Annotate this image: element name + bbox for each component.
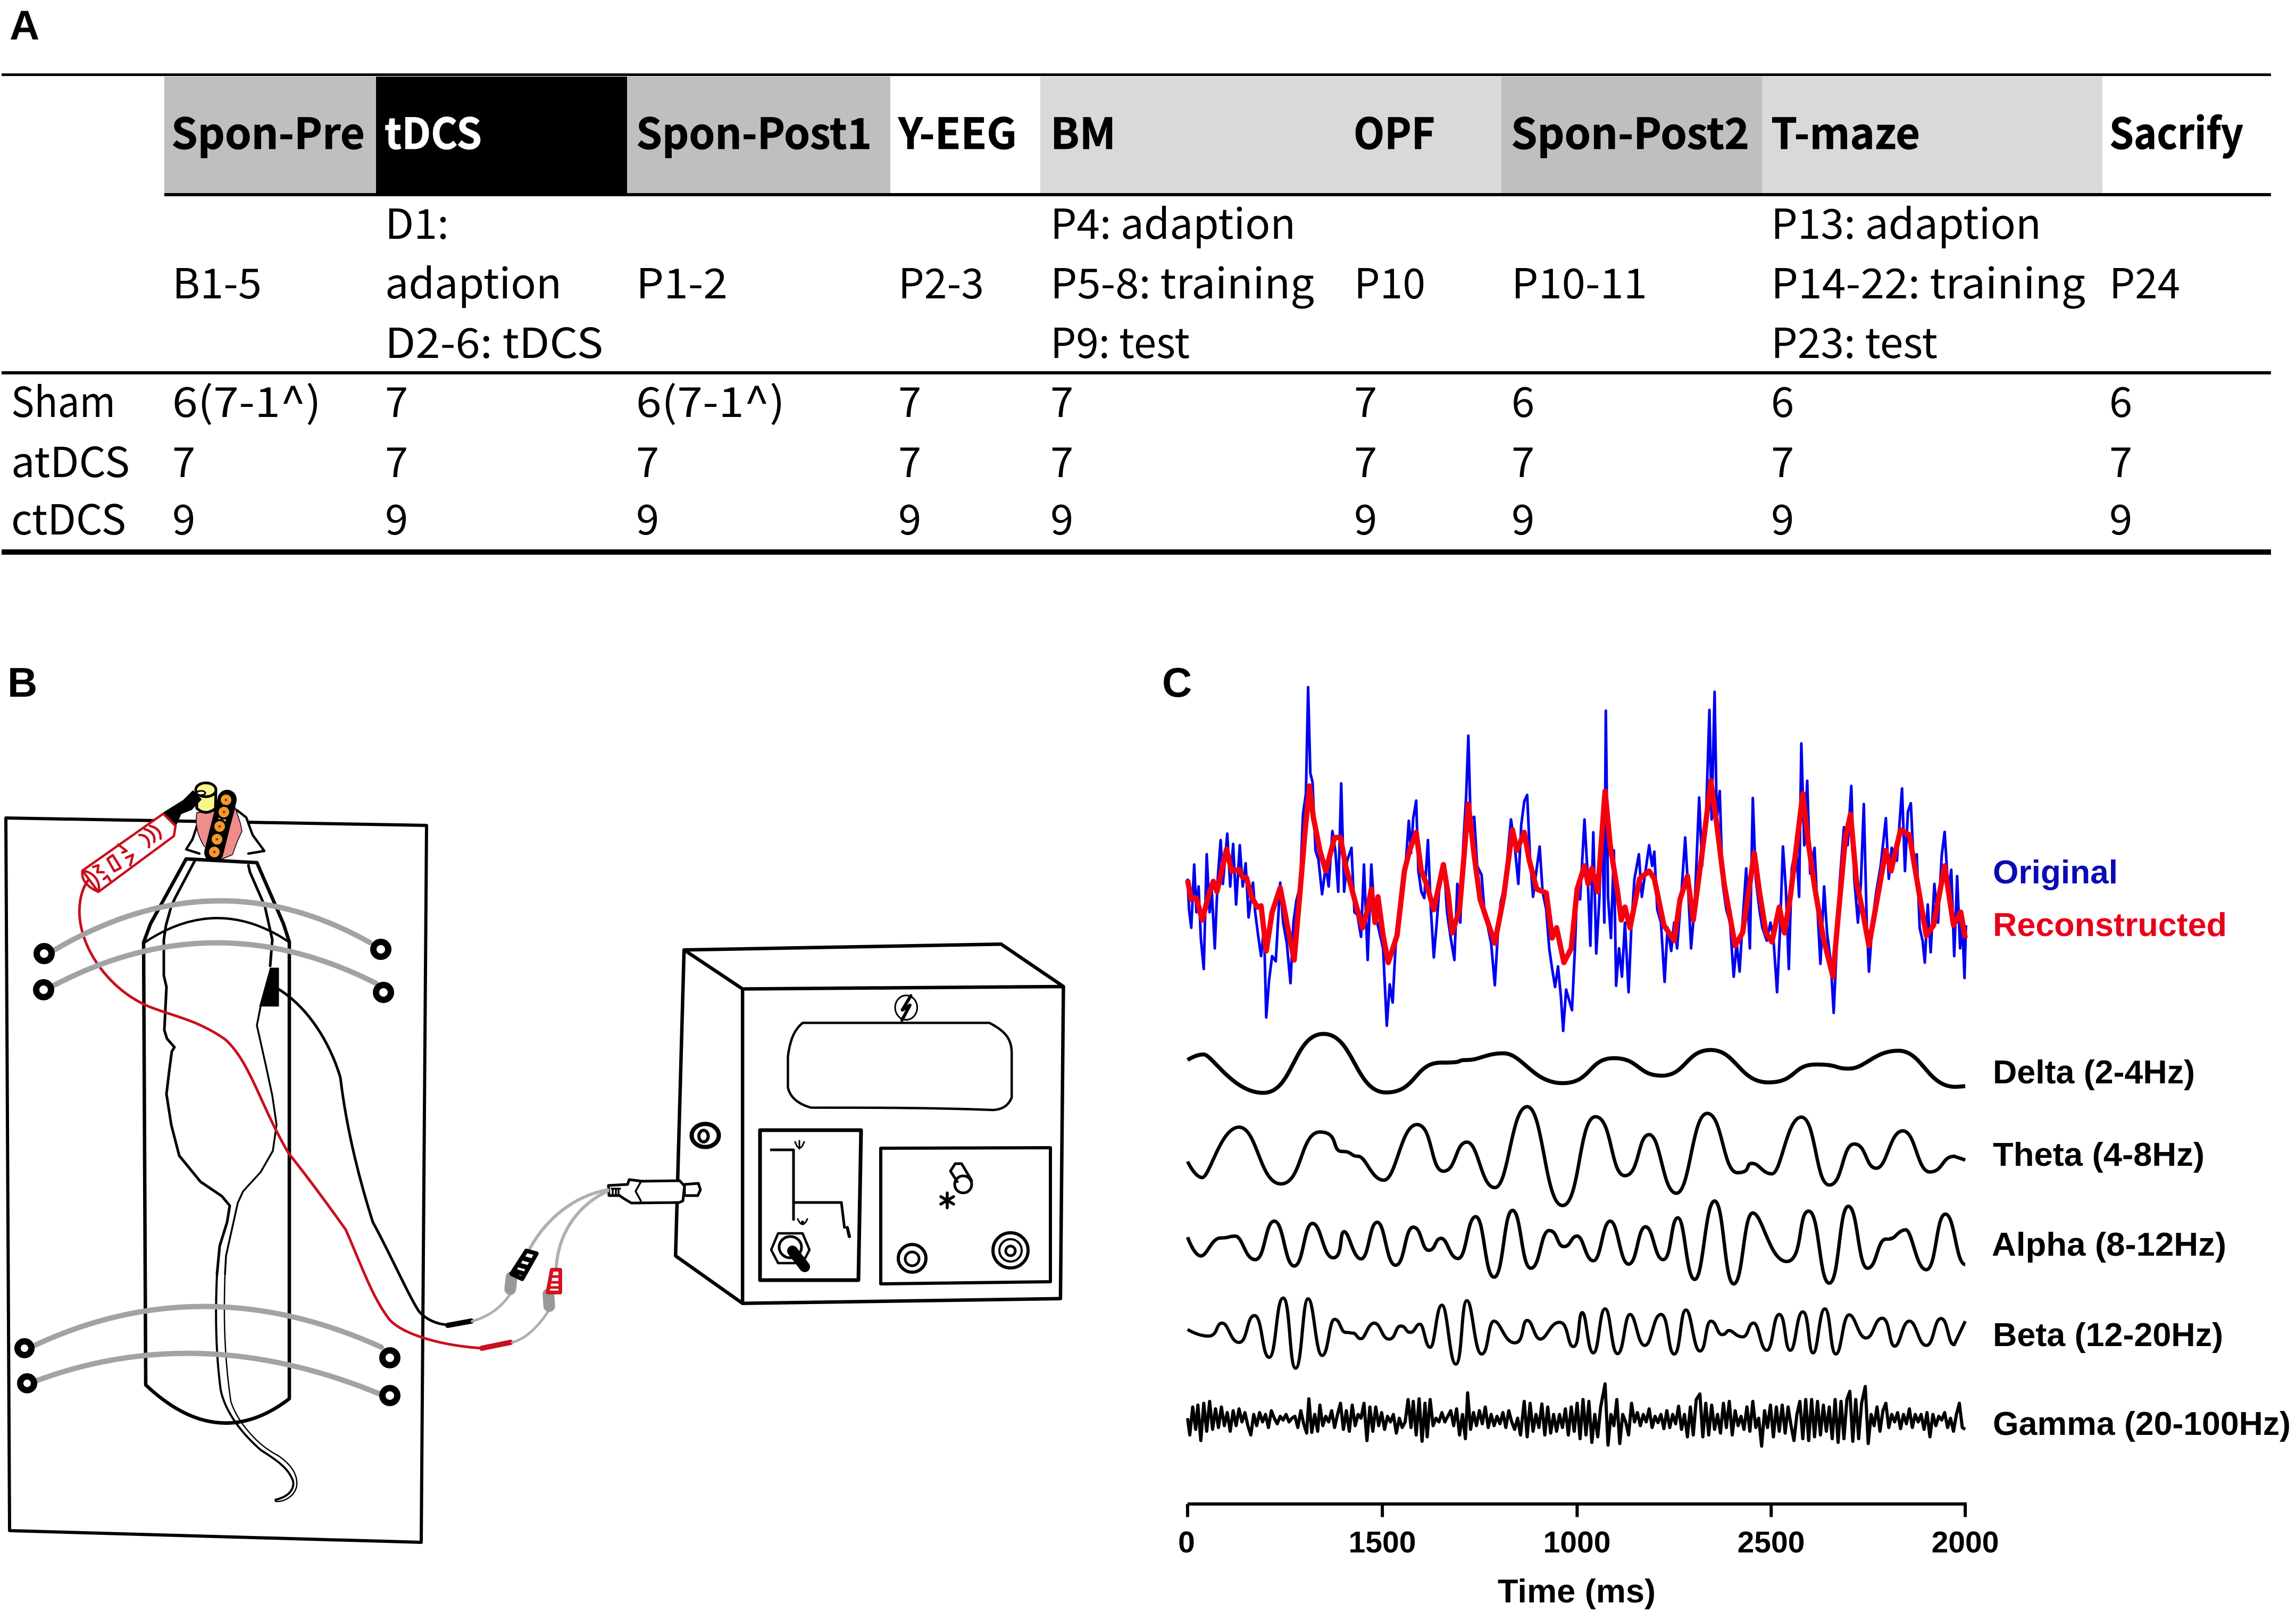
schedule row: P24 xyxy=(2109,251,2180,311)
alpha trace xyxy=(1188,1201,1965,1284)
legend: reconstructed: Reconstructed xyxy=(1993,907,2227,943)
axis tick labels: 1500 xyxy=(1349,1525,1416,1559)
table rules xyxy=(2,73,2271,555)
table header row: BM xyxy=(1050,100,1116,162)
switch panel xyxy=(760,1130,861,1280)
Sham row: 6 xyxy=(1771,370,1794,429)
schedule row: P4: adaption xyxy=(1050,191,1296,251)
atDCS row: 7 xyxy=(1050,430,1073,489)
yellow head electrode xyxy=(196,783,216,813)
atDCS row: 7 xyxy=(172,430,195,489)
schedule row: P2-3 xyxy=(898,251,984,311)
gamma trace xyxy=(1188,1384,1965,1446)
schedule row: P1-2 xyxy=(636,251,728,311)
band labels: Alpha (8-12Hz) xyxy=(1992,1226,2226,1263)
delta trace xyxy=(1188,1034,1965,1093)
Sham row: Sham xyxy=(11,370,115,429)
beta trace xyxy=(1188,1298,1965,1368)
split grey leads xyxy=(472,1190,608,1342)
frequency band traces xyxy=(1188,1034,1967,1517)
atDCS row: 7 xyxy=(898,430,921,489)
black body electrode and wire xyxy=(260,968,471,1325)
Sham row: 7 xyxy=(898,370,921,429)
table header row: T-maze xyxy=(1771,100,1920,162)
schedule row xyxy=(172,191,2180,370)
atDCS row: 7 xyxy=(1354,430,1377,489)
stimulator device with leads xyxy=(472,944,1063,1342)
band labels: Gamma (20-100Hz) xyxy=(1993,1406,2291,1442)
panel B: tDCS setup illustration xyxy=(6,659,1063,1542)
tube shoulder arc xyxy=(143,918,289,943)
atDCS row: 7 xyxy=(2109,430,2132,489)
black cable xyxy=(164,791,201,826)
atDCS row: 7 xyxy=(1771,430,1794,489)
table header row: Y-EEG xyxy=(898,100,1017,162)
schedule row: P13: adaption xyxy=(1771,191,2041,251)
Sham row: 6(7-1^) xyxy=(636,370,785,429)
ears xyxy=(186,810,264,854)
red head electrode wire xyxy=(79,878,511,1348)
schedule row: P23: test xyxy=(1771,311,1938,370)
ctDCS row: 9 xyxy=(385,487,408,547)
band labels xyxy=(1992,1054,2291,1442)
axis tick labels: 2000 xyxy=(1932,1525,1999,1559)
schedule row: adaption xyxy=(385,251,562,311)
panel label A: A xyxy=(10,2,39,48)
schedule row: D2-6: tDCS xyxy=(385,311,603,370)
table header row: Spon-Post1 xyxy=(636,100,872,162)
Sham row: 6 xyxy=(1512,370,1534,429)
plug xyxy=(608,1180,700,1203)
device housing xyxy=(675,944,1063,1304)
schedule row: P14-22: training xyxy=(1771,251,2085,311)
atDCS row: 7 xyxy=(636,430,659,489)
axis tick labels: 2500 xyxy=(1738,1525,1805,1559)
legend: original: Original xyxy=(1993,854,2118,891)
axis tick labels: 1000 xyxy=(1543,1525,1610,1559)
elastic straps xyxy=(29,901,383,1396)
atDCS row xyxy=(11,430,2132,489)
axis title: Time (ms) xyxy=(1498,1573,1656,1610)
output panel xyxy=(881,1148,1050,1284)
board outline xyxy=(6,818,427,1542)
red connector xyxy=(548,1270,560,1292)
Sham row: 6(7-1^) xyxy=(172,370,321,429)
black connector xyxy=(512,1251,537,1279)
raw and reconstructed signal xyxy=(1188,687,1966,1031)
strap pins xyxy=(18,942,397,1403)
schedule row: D1: xyxy=(385,191,449,251)
reconstructed red trace xyxy=(1188,781,1965,976)
axis tick labels xyxy=(1178,1525,1999,1559)
ctDCS row: 9 xyxy=(898,487,921,547)
time axis line and ticks xyxy=(1188,1504,1967,1517)
table header row: OPF xyxy=(1354,100,1435,162)
table header row xyxy=(164,77,2243,194)
red electrode connector xyxy=(82,814,176,892)
ctDCS row: 9 xyxy=(1050,487,1073,547)
restraint tube xyxy=(144,859,289,1423)
atDCS row: 7 xyxy=(385,430,408,489)
schedule row: B1-5 xyxy=(172,251,262,311)
panel label C: C xyxy=(1162,659,1192,706)
schedule row: P10 xyxy=(1354,251,1425,311)
Sham row: 7 xyxy=(385,370,408,429)
panel C: EEG decomposition chart xyxy=(1162,659,2291,1610)
restraint board with rat xyxy=(6,783,511,1542)
Sham row: 7 xyxy=(1354,370,1377,429)
table header row: tDCS xyxy=(385,100,482,162)
schedule row: P9: test xyxy=(1050,311,1190,370)
atDCS row: atDCS xyxy=(11,430,130,489)
ctDCS row: ctDCS xyxy=(11,487,126,547)
panel label B: B xyxy=(7,659,37,706)
electrode array xyxy=(208,794,232,858)
theta trace xyxy=(1188,1107,1965,1206)
band labels: Theta (4-8Hz) xyxy=(1993,1137,2205,1173)
exposed scalp xyxy=(196,807,242,860)
panel A: experiment timeline table xyxy=(2,2,2271,555)
rat body xyxy=(164,860,297,1501)
Sham row: 7 xyxy=(1050,370,1073,429)
ctDCS row: 9 xyxy=(636,487,659,547)
ctDCS row: 9 xyxy=(172,487,195,547)
band labels: Beta (12-20Hz) xyxy=(1993,1317,2223,1354)
atDCS row: 7 xyxy=(1512,430,1534,489)
axis tick labels: 0 xyxy=(1178,1525,1195,1559)
table header row: Spon-Post2 xyxy=(1511,100,1749,162)
schedule row: P10-11 xyxy=(1512,251,1647,311)
schedule row: P5-8: training xyxy=(1050,251,1314,311)
ctDCS row: 9 xyxy=(2109,487,2132,547)
ctDCS row: 9 xyxy=(1512,487,1534,547)
ctDCS row xyxy=(11,487,2132,547)
Sham row: 6 xyxy=(2109,370,2132,429)
band labels: Delta (2-4Hz) xyxy=(1993,1054,2195,1091)
original blue trace xyxy=(1188,687,1966,1031)
ctDCS row: 9 xyxy=(1354,487,1377,547)
table header row: Sacrify xyxy=(2109,100,2243,162)
Sham row xyxy=(11,370,2132,429)
ctDCS row: 9 xyxy=(1771,487,1794,547)
table header row: Spon-Pre xyxy=(171,100,365,162)
